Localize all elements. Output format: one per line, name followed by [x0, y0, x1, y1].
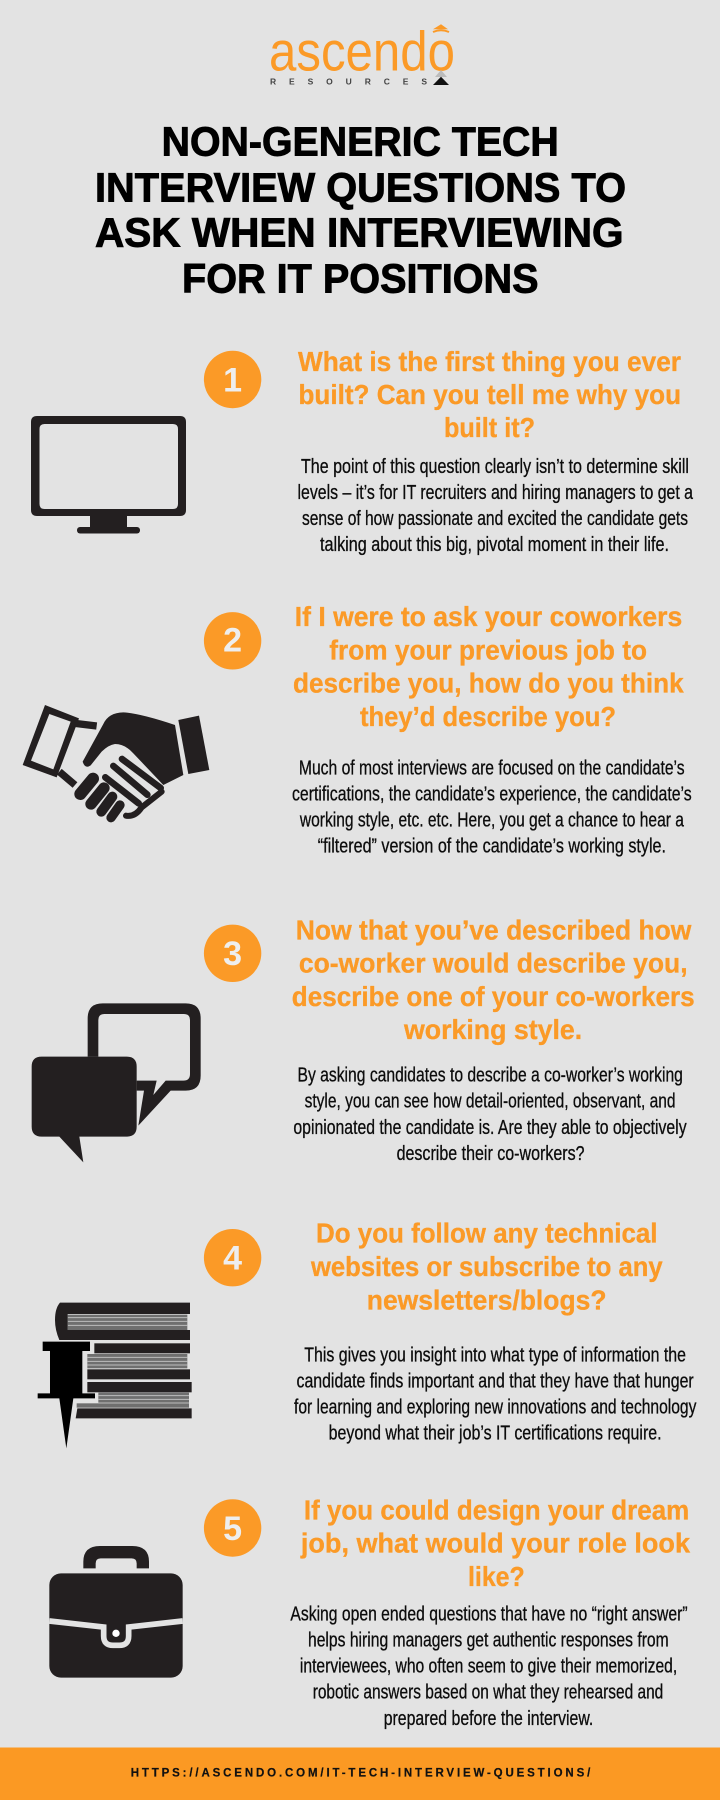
number badge 5 [204, 1499, 261, 1557]
title: NON-GENERIC TECH [162, 119, 559, 165]
question 2 heading: from your previous job to [329, 634, 647, 665]
question 2 body text [292, 757, 692, 858]
question 3 body text: describe their co-workers? [397, 1143, 584, 1165]
number badge 2: 2 [223, 622, 242, 660]
title: ASK WHEN INTERVIEWING [95, 210, 624, 256]
number badge 4: 4 [223, 1240, 242, 1278]
title [95, 119, 626, 301]
question 2 heading: describe you, how do you think [293, 668, 684, 699]
number badge 1 [204, 351, 261, 408]
question 3 heading: working style. [403, 1014, 582, 1045]
question 5 heading: If you could design your dream [304, 1494, 689, 1525]
footer bar with URL [0, 1748, 720, 1800]
question 5 heading: job, what would your role look [300, 1528, 690, 1559]
question 4 body text [294, 1345, 696, 1445]
panel: question 4 [38, 1218, 696, 1448]
number badge 2 [204, 612, 261, 670]
question 5 heading [300, 1494, 690, 1592]
question 4 heading: Do you follow any technical [316, 1218, 658, 1249]
question 5 heading: like? [468, 1561, 525, 1592]
icon: computer monitor [31, 416, 186, 534]
panel: question 2 [23, 601, 692, 858]
question 5 body text [290, 1604, 688, 1730]
question 1 heading [298, 346, 681, 443]
number badge 3 [204, 925, 261, 982]
question 1 heading: What is the first thing you ever [298, 346, 681, 377]
question 1 body text [298, 456, 694, 556]
question 3 body text [293, 1065, 687, 1165]
panel: question 1 [31, 346, 694, 556]
question 1 heading: built? Can you tell me why you [298, 379, 681, 410]
question 3 heading: co-worker would describe you, [299, 948, 688, 979]
panel: question 3 [32, 914, 695, 1165]
number badge 3: 3 [223, 935, 242, 973]
footer bar with URL: HTTPS://ASCENDO.COM/IT-TECH-INTERVIEW-QUESTIONS/ [131, 1768, 591, 1780]
number badge 1: 1 [223, 362, 242, 400]
icon: handshake [23, 705, 209, 818]
question 2 heading: If I were to ask your coworkers [295, 601, 682, 632]
question 4 heading: websites or subscribe to any [310, 1251, 663, 1282]
question 5 body text: prepared before the interview. [384, 1708, 593, 1730]
question 3 heading [292, 914, 695, 1045]
question 1 heading: built it? [444, 412, 535, 443]
number badge 5: 5 [223, 1510, 242, 1548]
icon: briefcase [49, 1546, 183, 1678]
logo: ascendo resources: RESOURCES [270, 77, 427, 87]
question 3 heading: Now that you’ve described how [296, 914, 692, 945]
question 4 heading [310, 1218, 663, 1315]
question 2 heading: they’d describe you? [360, 701, 616, 732]
icon: books and pushpin [38, 1303, 192, 1448]
question 2 heading [293, 601, 684, 732]
panel: question 5 [49, 1494, 690, 1730]
logo: ascendo resources: ascendo [269, 20, 455, 83]
title: INTERVIEW QUESTIONS TO [95, 164, 626, 210]
icon: speech bubbles [32, 1003, 201, 1162]
question 4 heading: newsletters/blogs? [367, 1284, 606, 1315]
question 3 heading: describe one of your co-workers [292, 981, 695, 1012]
number badge 4 [204, 1229, 261, 1286]
title: FOR IT POSITIONS [182, 255, 539, 301]
